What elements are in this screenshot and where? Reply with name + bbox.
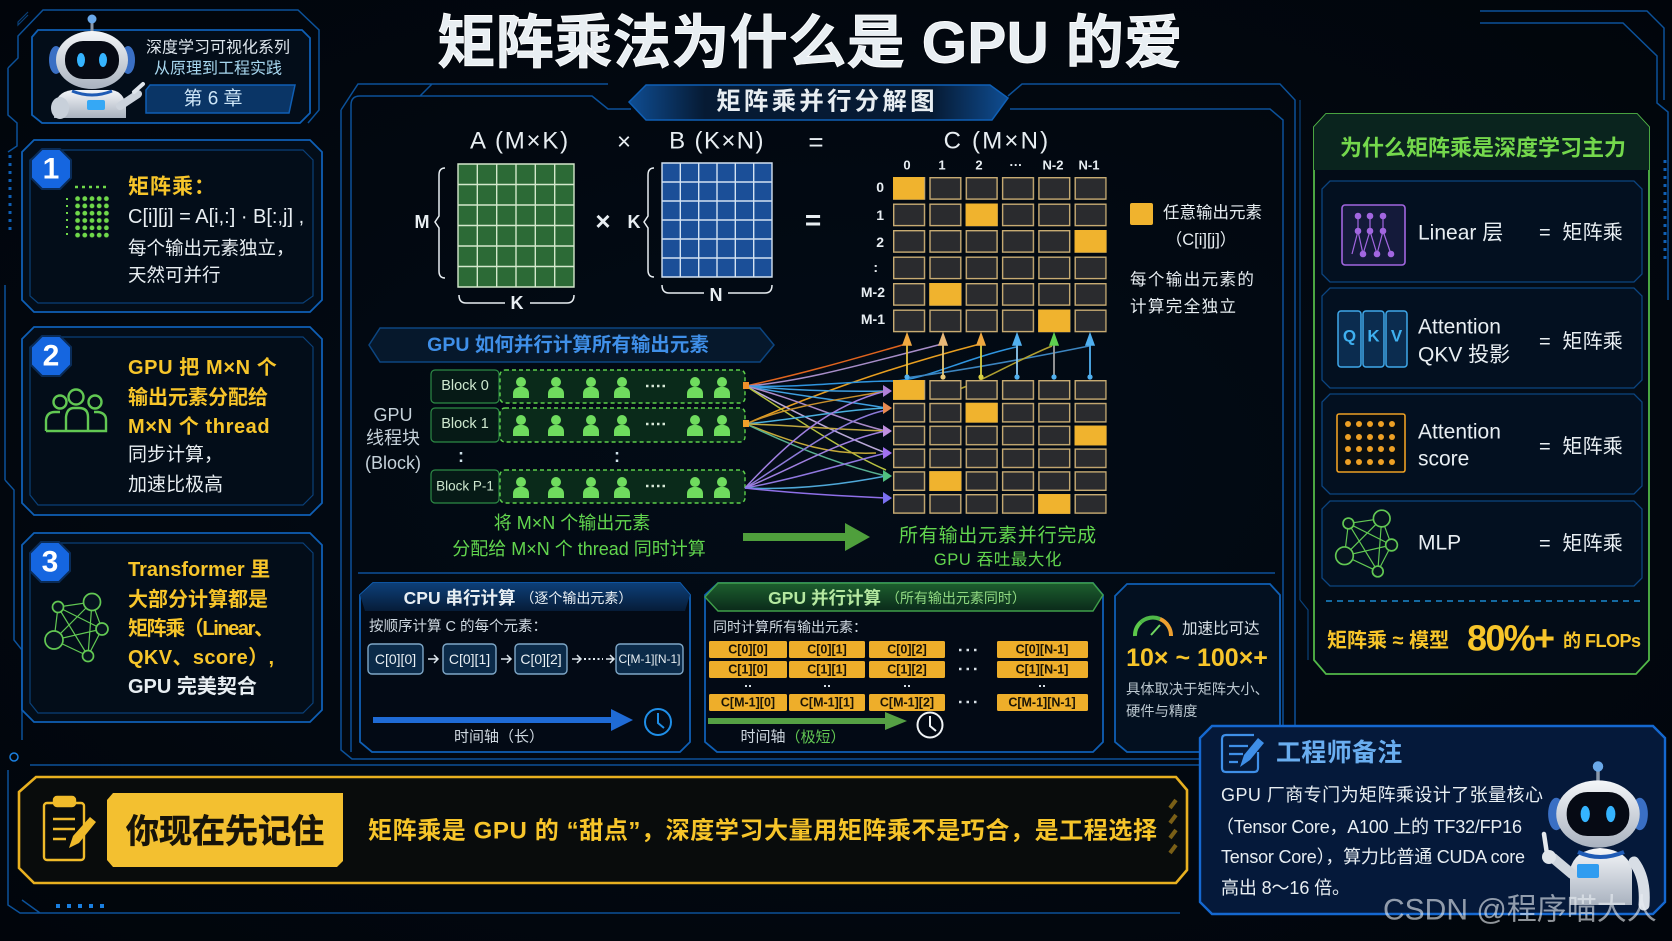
panel heading: decomposition diagram: 矩阵乘并行分解图 [716, 88, 938, 116]
series text: 深度学习可视化系列 [146, 38, 290, 56]
matrix headers: × [617, 128, 631, 156]
matrix headers: B (K×N) [669, 128, 765, 154]
bracket K: K [510, 293, 524, 313]
CPU header [360, 583, 690, 611]
parallel cell grid: C[M-1][0] [721, 696, 775, 710]
row: Linear: = 矩阵乘 [1539, 221, 1623, 244]
panel: GPU parallel [705, 583, 1103, 752]
number badge 2 [31, 336, 71, 376]
legend: 计算完全独立 [1130, 297, 1237, 316]
text block 2: M×N 个 thread [128, 415, 270, 438]
text block 1: C[i][j] = A[i,:] · B[:,j] , [128, 206, 304, 228]
icon: layers [1342, 205, 1405, 265]
row: MLP [1322, 501, 1642, 586]
clock [918, 712, 942, 738]
panel header [1314, 114, 1649, 170]
time label: 时间轴（极短） [740, 728, 846, 746]
watermark: CSDN @程序喵大人 [1383, 894, 1657, 926]
text block 3: 矩阵乘（Linear、 [128, 617, 274, 640]
number badge 1 [31, 149, 71, 189]
row: QKV: = 矩阵乘 [1539, 330, 1623, 353]
row labels: : [873, 259, 878, 275]
matrix B [628, 163, 772, 305]
block 1: Block 1 [441, 416, 489, 432]
parallel cell grid: C[0][1] [807, 642, 847, 656]
icon: note [1222, 735, 1264, 772]
legend: （C[i][j]） [1166, 230, 1236, 249]
title: 矩阵乘法为什么是 GPU 的爱 [437, 10, 1183, 76]
sequence boxes: C[M-1][N-1] [618, 652, 681, 666]
block P-1 [431, 470, 745, 503]
GPU thread label: (Block) [365, 453, 421, 473]
green caption: 分配给 M×N 个 thread 同时计算 [452, 539, 706, 559]
equals sign: = [805, 204, 821, 236]
time label: 时间轴（长） [454, 728, 544, 746]
row: QKV [1322, 288, 1642, 388]
source dots [743, 382, 749, 427]
note body: 高出 8～16 倍。 [1221, 878, 1350, 898]
legend: 每个输出元素的 [1130, 270, 1255, 289]
row labels: M-1 [861, 311, 885, 327]
fan-out arrows [743, 344, 1089, 504]
parallel cell grid: C[M-1][1] [800, 696, 854, 710]
green caption: 将 M×N 个输出元素 [494, 513, 650, 533]
text block 1: 天然可并行 [128, 264, 221, 286]
upward arrows [903, 334, 1094, 380]
thread blocks [431, 370, 745, 503]
row: score: = 矩阵乘 [1539, 435, 1623, 458]
parallel cell grid: C[M-1][2] [880, 696, 934, 710]
row labels [861, 179, 885, 327]
column labels: 2 [975, 158, 983, 172]
text block 1 [128, 176, 304, 286]
sequence boxes: C[0][1] [449, 651, 490, 667]
sequence boxes: C[0][0] [375, 651, 416, 667]
parallel cell grid: C[1][2] [887, 662, 927, 676]
panel header: 为什么矩阵乘是深度学习主力 [1340, 136, 1626, 160]
tag: 你现在先记住 [126, 812, 324, 850]
text block 3: QKV、score）, [128, 646, 274, 669]
tag [107, 793, 343, 867]
parallel cell grid: C[1][0] [728, 662, 768, 676]
GPU thread label [365, 405, 421, 473]
text block 3: GPU 完美契合 [128, 674, 257, 698]
text block 2: 同步计算， [128, 444, 223, 466]
column labels: 1 [938, 158, 946, 172]
gauge icon [1135, 618, 1171, 636]
panel: speed-up [1115, 584, 1280, 752]
number badge 3: 3 [42, 546, 58, 578]
row: score [1322, 394, 1642, 494]
speed-up text: 10× ~ 100×+ [1126, 644, 1268, 672]
banner: GPU parallel heading: GPU 如何并行计算所有输出元素 [427, 333, 709, 356]
row: Linear [1322, 181, 1642, 282]
legend: 任意输出元素 [1163, 203, 1262, 222]
row: QKV: Attention [1418, 316, 1501, 338]
GPU header: GPU 并行计算 （所有输出元素同时） [768, 588, 1026, 608]
parallel cell grid: C[M-1][N-1] [1008, 696, 1076, 710]
sequence boxes [368, 644, 683, 674]
timeline arrow [708, 712, 907, 730]
block 0 [431, 370, 745, 403]
stat: 80% FLOPs: 80%+ [1467, 618, 1555, 658]
parallel cell grid: C[0][N-1] [1016, 642, 1068, 656]
bracket K: K [628, 212, 640, 232]
matrix headers [470, 127, 1050, 157]
message: 矩阵乘是 GPU 的 “甜点”，深度学习大量用矩阵乘不是巧合，是工程选择 [368, 818, 1157, 844]
GPU header [705, 583, 1103, 611]
text block 3: Transformer 里 [128, 559, 270, 581]
matrix C top [861, 158, 1107, 336]
parallel cell grid [709, 641, 1088, 711]
text block 2: 加速比极高 [128, 474, 223, 496]
series text [146, 38, 290, 78]
text block 2: GPU 把 M×N 个 [128, 356, 277, 379]
CPU subtitle: 按顺序计算 C 的每个元素： [369, 618, 547, 635]
bracket K [459, 293, 574, 313]
icon: MLP network [1336, 510, 1397, 577]
number badge 1: 1 [43, 152, 59, 186]
panel: point 2 [22, 327, 322, 515]
arrowheads [883, 385, 892, 504]
panel: point 1 [22, 140, 322, 312]
bracket K [628, 168, 654, 277]
icon: dot matrix [67, 187, 110, 239]
parallel cell grid: C[0][0] [728, 642, 768, 656]
green result caption: GPU 吞吐最大化 [934, 550, 1062, 569]
bracket M: M [414, 212, 430, 232]
green result caption: 所有输出元素并行完成 [899, 524, 1097, 546]
panel: point 3 [22, 533, 322, 722]
panel: CPU serial [360, 583, 690, 752]
parallel cell grid: C[1][N-1] [1016, 662, 1068, 676]
row: QKV: QKV 投影 [1418, 344, 1510, 366]
bracket N: N [710, 285, 722, 305]
chapter badge: 第 6 章 [183, 88, 243, 110]
stat: 80% FLOPs: 矩阵乘 ≈ 模型 [1327, 629, 1449, 652]
text block 1: 矩阵乘： [128, 176, 216, 198]
text block 2 [128, 356, 277, 496]
speed-up text: 加速比可达 [1182, 620, 1260, 638]
row labels: M-2 [861, 284, 885, 300]
column labels: ··· [1010, 158, 1022, 172]
row labels: 2 [876, 234, 884, 250]
speed-up text: 具体取决于矩阵大小、 [1126, 681, 1269, 698]
icon: QKV: K [1367, 326, 1380, 346]
speed-up text: 硬件与精度 [1126, 703, 1197, 720]
icon: score grid [1337, 414, 1405, 472]
icon: QKV: Q [1343, 326, 1356, 346]
row labels: 0 [876, 179, 884, 195]
icon: QKV: V [1391, 326, 1403, 346]
sequence boxes: C[0][2] [520, 651, 562, 667]
matrix headers: A (M×K) [470, 128, 570, 154]
number badge 3 [30, 542, 70, 582]
series text: 从原理到工程实践 [154, 60, 282, 78]
row: Linear: Linear 层 [1418, 222, 1503, 244]
text block 3 [128, 559, 274, 698]
panel: why matrix multiply [1314, 114, 1649, 674]
note body: Tensor Core），算力比普通 CUDA core [1221, 847, 1525, 867]
GPU thread label: 线程块 [366, 428, 420, 448]
column labels: N-1 [1079, 158, 1099, 172]
icon: neural network [45, 594, 108, 662]
panel: engineer note [1200, 726, 1665, 914]
note body [1216, 785, 1543, 898]
CPU header: CPU 串行计算 （逐个输出元素） [404, 588, 632, 608]
green caption [452, 513, 706, 559]
parallel cell grid: C[0][2] [887, 642, 927, 656]
reminder banner [19, 777, 1187, 883]
row: MLP: MLP [1418, 532, 1461, 554]
text block 2: 输出元素分配给 [128, 386, 268, 409]
legend [1130, 203, 1262, 316]
block P-1: Block P-1 [436, 478, 494, 494]
text block 3: 大部分计算都是 [128, 588, 268, 611]
clock [645, 709, 671, 735]
matrix C bottom [893, 380, 1107, 516]
GPU subtitle: 同时计算所有输出元素： [713, 619, 867, 635]
note body: GPU 厂商专门为矩阵乘设计了张量核心 [1221, 785, 1543, 805]
text block 1: 每个输出元素独立， [128, 238, 295, 258]
column labels: 0 [903, 158, 911, 172]
bracket N [662, 285, 772, 305]
banner: GPU parallel heading [369, 328, 774, 362]
icon: clipboard [44, 797, 96, 860]
bracket M [414, 168, 445, 278]
icon: robot mascot [49, 14, 143, 119]
note body: （Tensor Core，A100 上的 TF32/FP16 [1216, 817, 1522, 837]
multiply sign: × [595, 206, 611, 236]
row: score: Attention [1418, 420, 1501, 444]
row: score: score [1418, 448, 1469, 470]
matrix A [414, 164, 574, 313]
row: MLP: = 矩阵乘 [1539, 532, 1623, 555]
matrix headers: C (M×N) [944, 128, 1050, 154]
column labels: N-2 [1043, 158, 1063, 172]
GPU thread label: GPU [373, 405, 413, 425]
icon: people [46, 390, 106, 431]
stat: 80% FLOPs: 的 FLOPs [1563, 631, 1641, 651]
icon: QKV [1338, 311, 1407, 367]
thread icons [461, 377, 730, 498]
block 0: Block 0 [441, 378, 489, 394]
stat: 80% FLOPs [1327, 618, 1641, 658]
panel: chapter header [32, 14, 310, 123]
chapter badge [146, 85, 295, 113]
timeline arrow [373, 709, 633, 731]
parallel cell grid: C[1][1] [807, 662, 847, 676]
icon: robot pointing [1542, 761, 1648, 905]
matrix headers: = [808, 127, 824, 157]
column labels [903, 158, 1099, 172]
note heading: 工程师备注 [1276, 739, 1403, 767]
panel heading: decomposition diagram [629, 85, 1008, 120]
green result caption [899, 524, 1097, 569]
arrow: result [743, 523, 870, 551]
row labels: 1 [876, 207, 884, 223]
block 1 [431, 408, 745, 442]
number badge 2: 2 [43, 340, 59, 372]
speed-up text [1126, 620, 1269, 720]
